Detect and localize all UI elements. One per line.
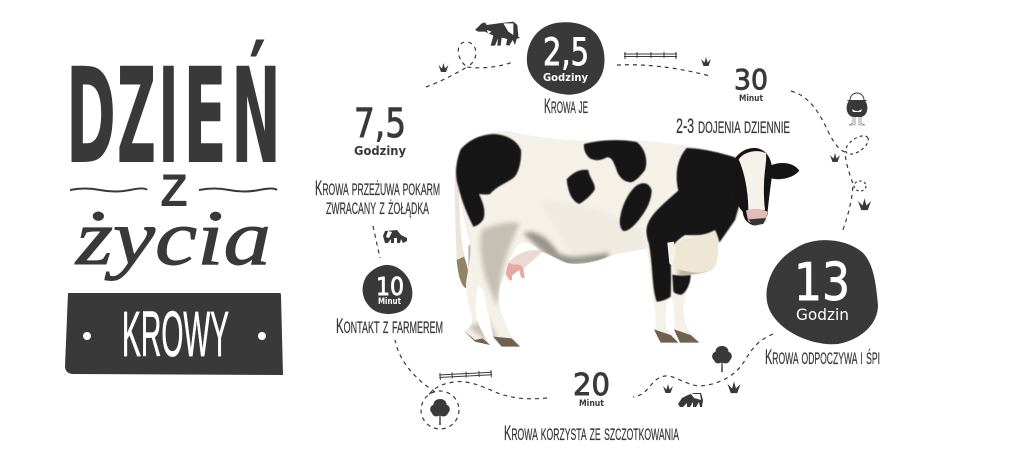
cow: white blaze (739, 151, 766, 210)
title: z with wavy rules (70, 165, 277, 216)
title: DZIEŃ: Z (117, 40, 156, 194)
dashed trail: top left with loop (426, 42, 513, 87)
icon: cow top (475, 22, 520, 46)
dashed trail: bottom right (633, 334, 773, 397)
icon: cow bottom (678, 393, 703, 407)
stat: 20 Minut: Minut (579, 399, 604, 409)
title: DZIEŃ (66, 39, 281, 194)
cow: far leg shadow (468, 230, 481, 290)
icon: fence bottom (439, 370, 492, 380)
stat: 20 Minut: 20 (573, 368, 610, 403)
cow: black back patch (584, 140, 646, 182)
stat: 13 Godzin blob: Godzin (796, 305, 849, 324)
label: chewing: KROWA PRZEŻUWA POKARM (315, 177, 440, 200)
cow: muzzle (746, 209, 767, 225)
cow: black front leg patch (672, 275, 691, 295)
label: brushing: KROWA KORZYSTA ZE SZCZOTKOWANIA (504, 422, 679, 445)
cow: head (732, 148, 799, 225)
cow: hooves (464, 329, 699, 347)
dashed trail: bottom left around tree (395, 340, 547, 429)
cow: udder (506, 250, 542, 281)
stat: 30 Minut: 30 (734, 63, 768, 96)
cow photo illustration (455, 131, 799, 347)
icon: cow left small (383, 230, 407, 243)
stat: 2,5 Godziny blob: 2,5 (543, 31, 589, 74)
cow: body shading (468, 200, 718, 343)
stat: 10 Minut blob: 10 (376, 272, 404, 301)
dashed trail: top right (617, 65, 710, 76)
stat: 7,5 Godziny: Godziny (354, 143, 406, 158)
title: DZIEŃ: I (158, 40, 179, 194)
label: chewing (315, 177, 440, 218)
stat: 7,5 Godziny (354, 101, 406, 158)
stat: 2,5 Godziny blob: Godziny (543, 71, 588, 84)
title: DZIEŃ: E (183, 40, 227, 194)
label: chewing: ZWRACANY Z ŻOŁĄDKA (326, 199, 429, 218)
label: resting: KROWA ODPOCZYWA I ŚPI (765, 346, 880, 369)
label: eating: KROWA JE (544, 95, 588, 118)
icon: fence top (624, 52, 677, 59)
cow: black side spot (567, 170, 595, 204)
cow: tail (455, 167, 469, 289)
stat: 10 Minut blob (363, 265, 412, 314)
label: farmer contact: KONTAKT Z FARMEREM (336, 315, 443, 338)
cow: black rump patch (456, 134, 521, 227)
cow: black oval spot (620, 183, 652, 231)
stat: 30 Minut: Minut (739, 94, 763, 104)
icon: farmer (847, 93, 867, 125)
stat: 10 Minut blob: Minut (378, 297, 401, 307)
banner: krowy: KROWY (122, 298, 229, 370)
icon: tree right (712, 346, 732, 372)
title: z with wavy rules: Z (160, 165, 188, 216)
icons: grass tufts (438, 57, 871, 393)
label: milking: 2-3 DOJENIA DZIENNIE (676, 115, 790, 138)
dashed trail: left short (373, 226, 380, 258)
cow: white body (459, 131, 742, 347)
stat: 13 Godzin blob (766, 240, 878, 344)
cow: black shoulder and neck (646, 148, 742, 302)
stat: 2,5 Godziny blob (527, 22, 604, 95)
banner: krowy (65, 293, 283, 375)
text: Ń (231, 39, 281, 194)
icon: tree left (430, 399, 450, 425)
title: życia script: życia (75, 194, 271, 281)
cow: white chest streak (667, 242, 675, 267)
title: DZIEŃ: D (66, 40, 116, 194)
stat: 13 Godzin blob: 13 (794, 253, 850, 313)
stat: 7,5 Godziny: 7,5 (354, 101, 406, 147)
dashed trail: right side with loops (791, 91, 871, 233)
